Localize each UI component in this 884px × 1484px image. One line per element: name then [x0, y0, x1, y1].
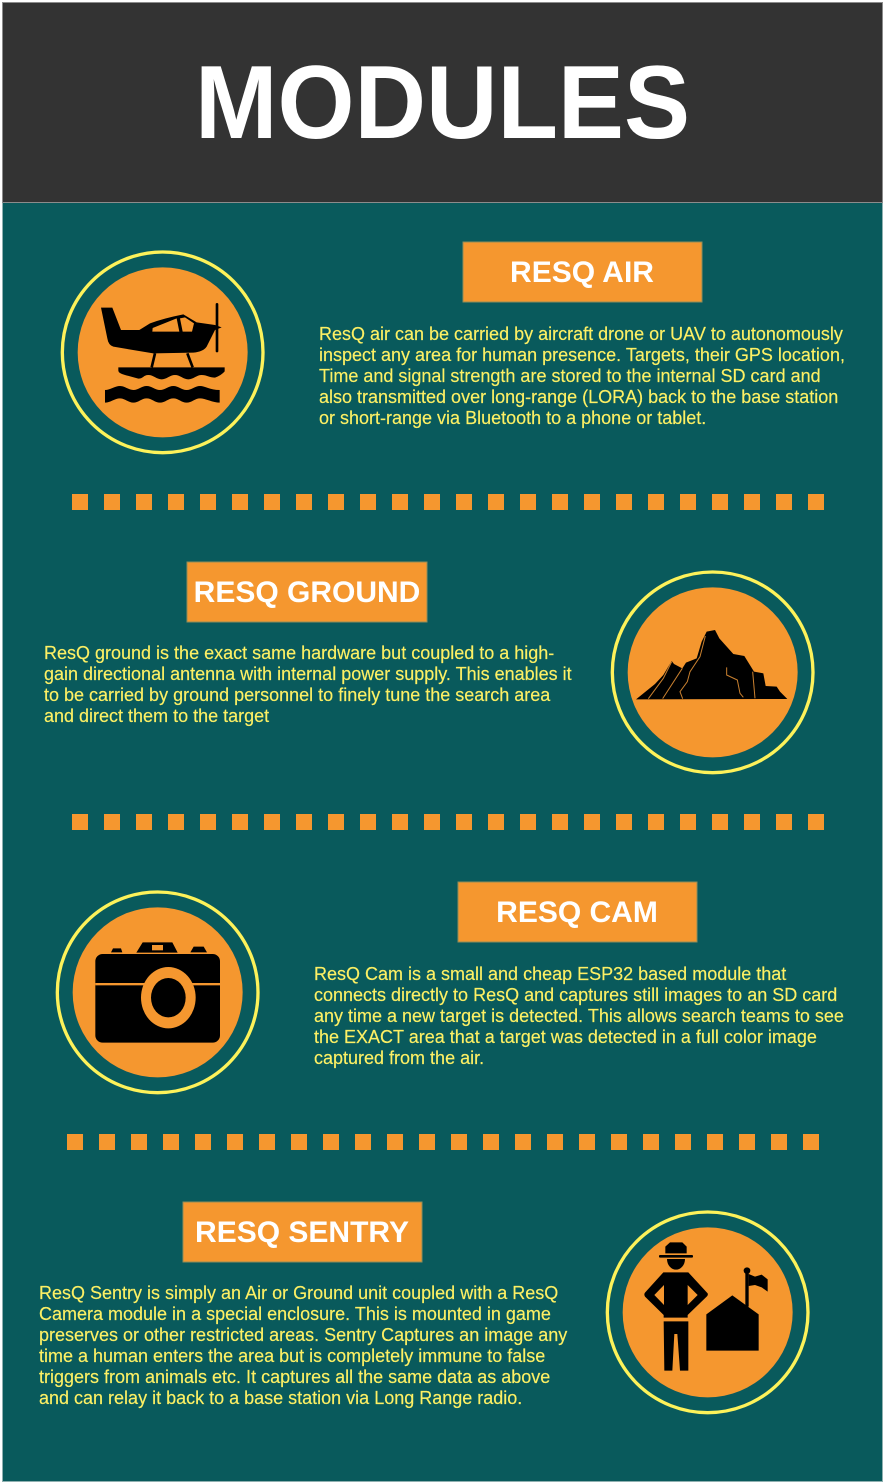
text: ResQ Ground description: gain directional antenna with internal power supply. This enables it — [44, 664, 572, 684]
text: ResQ Air description: or short-range via Bluetooth to a phone or tablet. — [319, 408, 706, 428]
text: ResQ Cam description: ResQ Cam is a small and cheap ESP32 based module that — [314, 964, 786, 984]
icon: mountain badge — [612, 572, 813, 773]
text: ResQ Ground description: and direct them to the target — [44, 706, 269, 726]
heading: ResQ Ground — [187, 562, 427, 622]
heading: ResQ Ground: RESQ GROUND — [194, 576, 420, 609]
text: ResQ Ground description: ResQ ground is the exact same hardware but coupled to a high- — [44, 643, 554, 663]
panel: ResQ Air — [62, 242, 850, 453]
text: ResQ Sentry description: Camera module in a special enclosure. This is mounted in game — [39, 1304, 551, 1324]
text: ResQ Cam description: the EXACT area that a target was detected in a full color image — [314, 1027, 817, 1047]
heading: ResQ Air — [463, 242, 702, 302]
text: ResQ Sentry description: and can relay it back to a base station via Long Range radio. — [39, 1388, 522, 1408]
heading: ResQ Sentry — [183, 1202, 422, 1262]
panel: ResQ Ground — [44, 562, 813, 773]
text: ResQ Cam description: captured from the air. — [314, 1048, 484, 1068]
text: ResQ Cam description: connects directly to ResQ and captures still images to an SD card — [314, 985, 837, 1005]
text: ResQ Air description: Time and signal strength are stored to the internal SD card and — [319, 366, 821, 386]
heading: ResQ Cam: RESQ CAM — [496, 896, 658, 929]
icon: ranger and station badge — [607, 1212, 808, 1413]
icon: seaplane badge — [62, 252, 263, 453]
text: ResQ Ground description: to be carried by ground personnel to finely tune the search area — [44, 685, 551, 705]
heading: ResQ Air: RESQ AIR — [510, 256, 654, 289]
heading: ResQ Sentry: RESQ SENTRY — [195, 1216, 409, 1249]
icon: camera badge — [57, 892, 258, 1093]
panel: ResQ Cam — [57, 882, 849, 1093]
text: ResQ Air description: also transmitted over long-range (LORA) back to the base station — [319, 387, 838, 407]
title: MODULES — [195, 45, 690, 161]
heading: ResQ Cam — [458, 882, 697, 942]
text: ResQ Air description: ResQ air can be carried by aircraft drone or UAV to autonomously — [319, 324, 843, 344]
header panel — [2, 2, 882, 202]
text: ResQ Sentry description: triggers from animals etc. It captures all the same data as above — [39, 1367, 550, 1387]
text: ResQ Cam description: any time a new target is detected. This allows search teams to see — [314, 1006, 844, 1026]
text: ResQ Air description: inspect any area for human presence. Targets, their GPS location, — [319, 345, 845, 365]
text: ResQ Sentry description: ResQ Sentry is simply an Air or Ground unit coupled with a ResQ — [39, 1283, 558, 1303]
text: ResQ Sentry description: time a human enters the area but is completely immune to false — [39, 1346, 545, 1366]
panel: ResQ Sentry — [39, 1202, 808, 1413]
text: ResQ Sentry description: preserves or other restricted areas. Sentry Captures an image any — [39, 1325, 567, 1345]
